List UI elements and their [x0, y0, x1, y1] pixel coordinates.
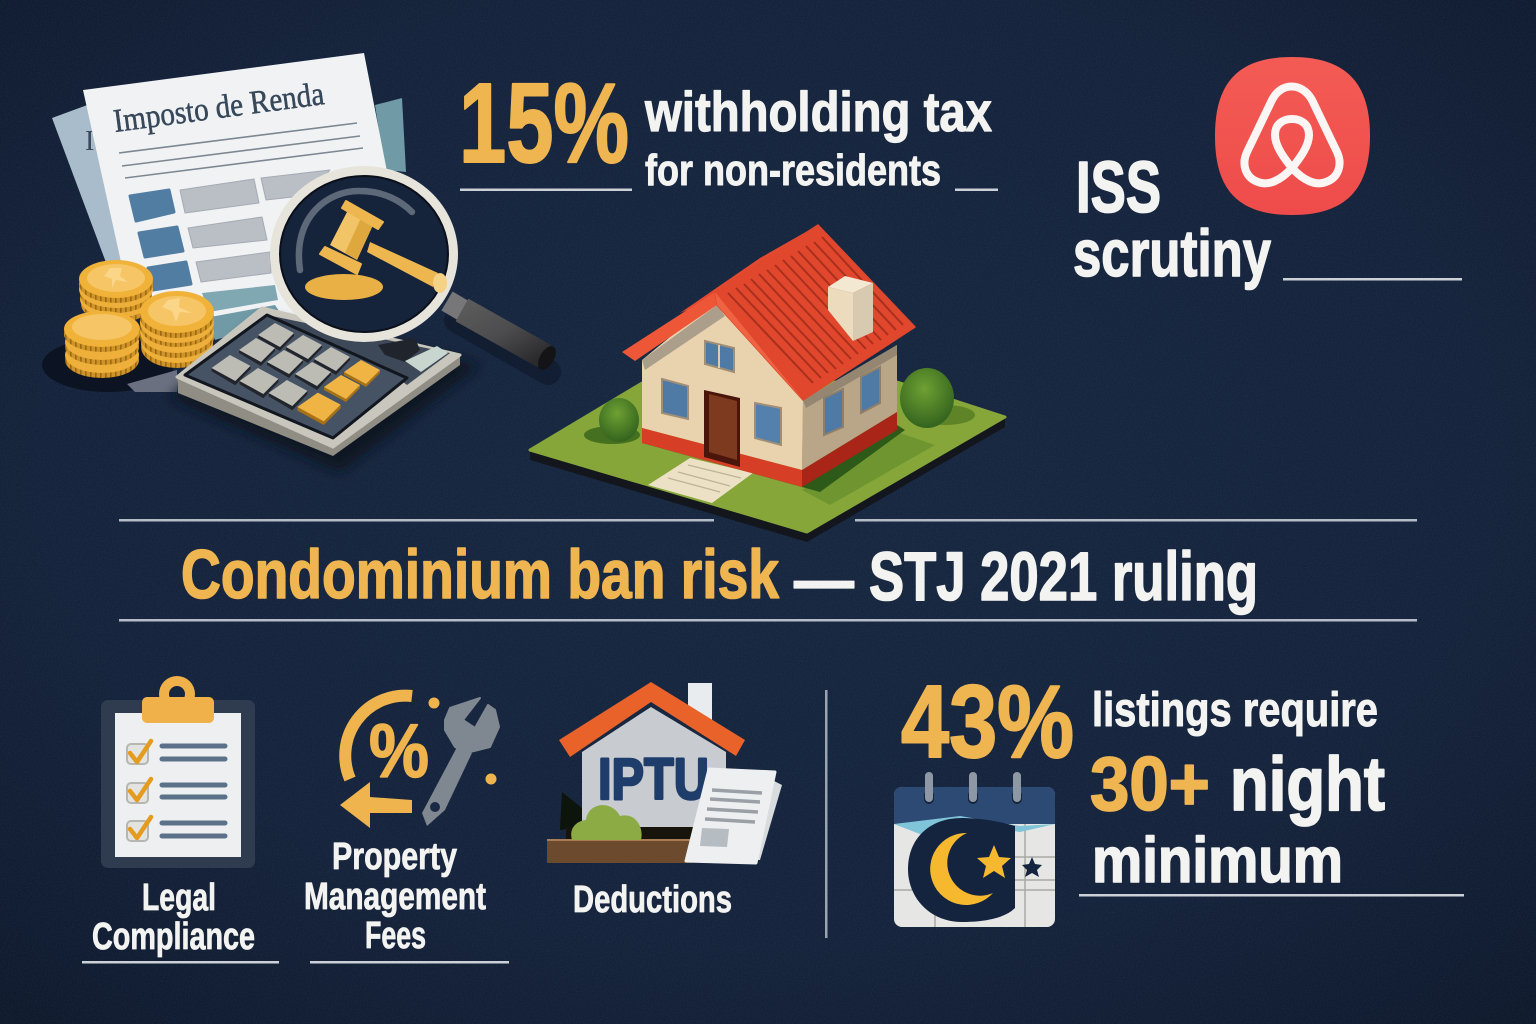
stat: ISS scrutiny: ISS — [1076, 148, 1161, 228]
stat: ISS scrutiny — [1073, 148, 1462, 290]
illustration: tax documents, coins, calculator and magnifier — [42, 53, 560, 472]
icon: calculator — [170, 308, 480, 472]
house walls — [642, 300, 897, 487]
stat: 43% listings require 30+ night minimum: 43% — [901, 664, 1074, 779]
house walkway — [648, 458, 753, 503]
divider lines around ruling banner — [119, 519, 1417, 622]
icon: back papers: I — [85, 126, 94, 157]
form title: Imposto de Renda — [111, 76, 327, 140]
stat: 43% listings require 30+ night minimum — [901, 664, 1464, 896]
icon: tax form — [83, 53, 410, 340]
heading: condominium ban risk — [181, 536, 1258, 618]
icon: IPTU house with document — [547, 682, 782, 863]
form table cells — [130, 170, 330, 340]
icon: clipboard checklist — [101, 676, 255, 868]
item: property management fees — [304, 696, 509, 964]
label: property management fees: Fees — [365, 915, 426, 957]
stat: 43% listings require 30+ night minimum: 30+ — [1090, 742, 1210, 827]
house windows and door — [662, 341, 880, 467]
stat: 43% listings require 30+ night minimum: night — [1230, 742, 1385, 827]
icon: coin stacks — [42, 260, 214, 392]
icon: back papers — [52, 98, 406, 300]
heading: condominium ban risk: STJ 2021 ruling — [869, 538, 1258, 615]
label: legal compliance — [92, 877, 255, 958]
icon: Airbnb app logo — [1215, 57, 1370, 215]
stat: ISS scrutiny: scrutiny — [1073, 216, 1271, 290]
icon: percent arrow and wrench — [340, 696, 499, 828]
label: deductions: Deductions — [573, 879, 732, 921]
icon: calendar with moon — [894, 772, 1055, 927]
item: legal compliance — [82, 676, 279, 964]
label: legal compliance: Compliance — [92, 916, 255, 958]
stat: 43% listings require 30+ night minimum: listings require — [1092, 684, 1378, 737]
house bushes — [599, 368, 954, 442]
label: property management fees: Property — [332, 836, 457, 878]
house roof — [622, 225, 915, 400]
icon: percent arrow and wrench: % — [369, 709, 429, 794]
house chimney — [828, 276, 873, 341]
stat: 15% withholding tax: withholding tax — [644, 80, 992, 143]
stat: 43% listings require 30+ night minimum: minimum — [1092, 824, 1343, 896]
stat: 15% withholding tax — [459, 60, 998, 195]
illustration: isometric house — [530, 225, 1005, 542]
label: property management fees: Management — [304, 876, 486, 918]
coin stack B — [64, 311, 140, 378]
stat: 15% withholding tax: for non-residents — [645, 146, 941, 195]
house lawn — [530, 382, 1005, 542]
vertical divider — [825, 690, 828, 938]
heading: condominium ban risk: — — [794, 541, 854, 618]
icon: IPTU house with document: IPTU — [598, 747, 709, 812]
label: legal compliance: Legal — [142, 877, 216, 919]
stat: 15% withholding tax: 15% — [459, 60, 629, 186]
coin stack C — [140, 291, 214, 368]
icon: magnifying glass with gavel — [270, 166, 560, 373]
item: IPTU deductions — [547, 682, 782, 921]
label: property management fees — [304, 836, 486, 957]
heading: condominium ban risk: Condominium ban risk — [181, 536, 779, 613]
coin stack A — [79, 260, 153, 323]
